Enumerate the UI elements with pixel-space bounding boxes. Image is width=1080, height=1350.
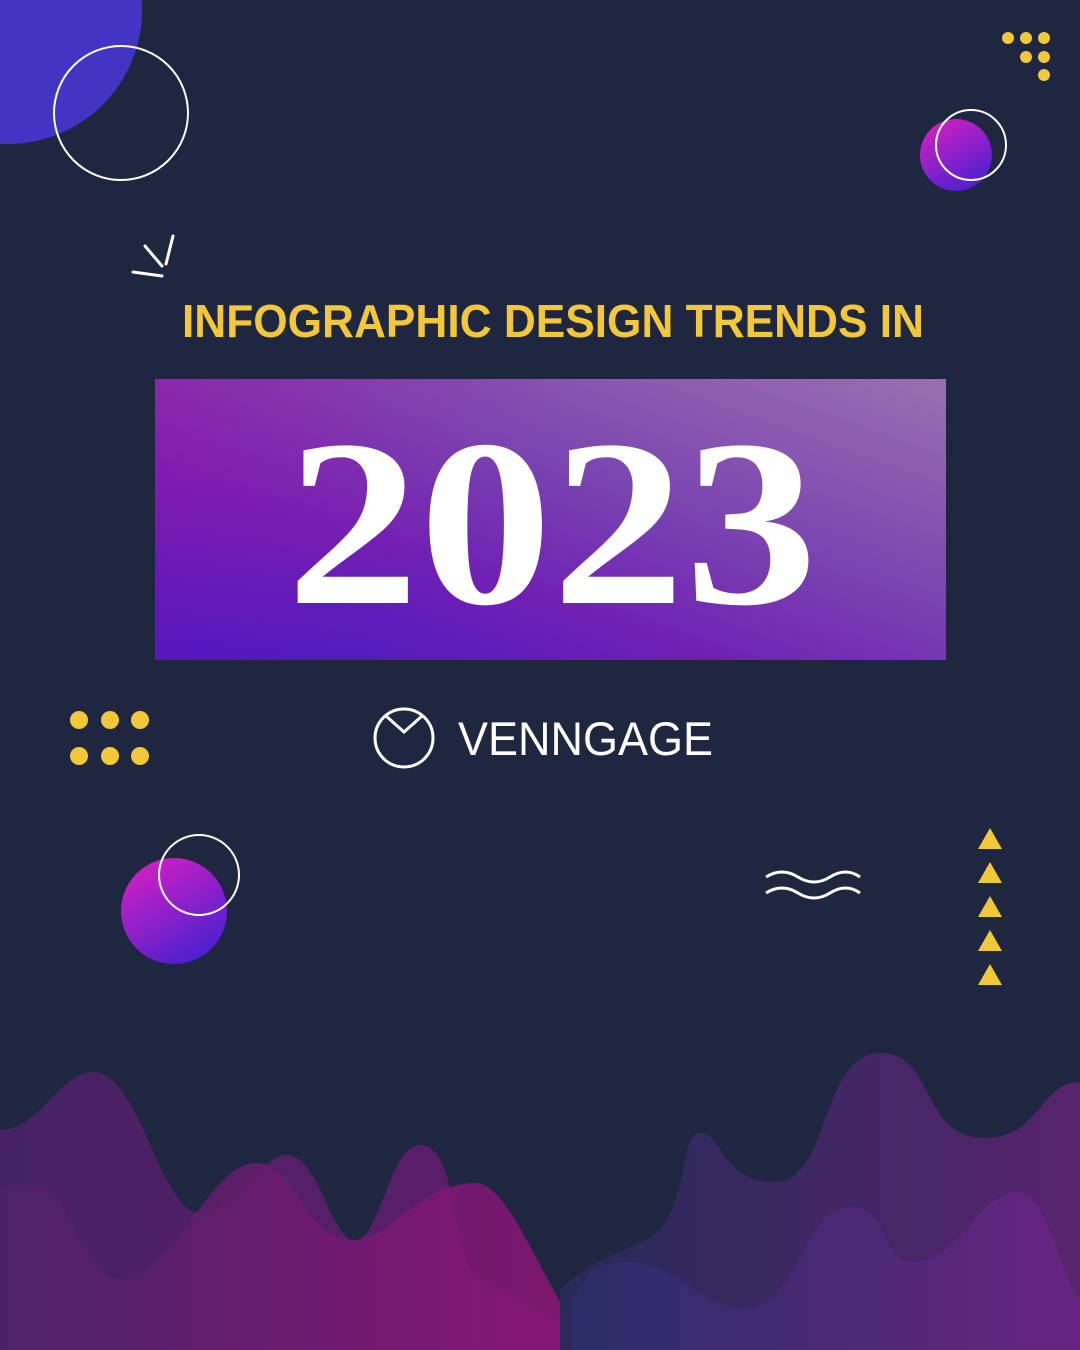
decoration: yellow triangles [978,828,1002,985]
title: INFOGRAPHIC DESIGN TRENDS IN [182,295,924,347]
icon: sparkle lines [133,236,173,276]
decoration: yellow dots top-right [1002,32,1050,81]
year banner [155,379,946,660]
background waves [0,1053,1080,1350]
decoration: gradient ball top-right [920,110,1006,191]
icon: waves [766,872,860,898]
decoration: gradient ball left [121,835,239,964]
year banner: 2023 [286,392,818,655]
logo: venngage: VENNGAGE [458,712,713,765]
decoration: outline circle top-left [54,46,188,180]
logo: venngage [375,709,713,767]
decoration: yellow dots left [70,711,149,765]
decoration: blue corner circle [0,0,142,144]
